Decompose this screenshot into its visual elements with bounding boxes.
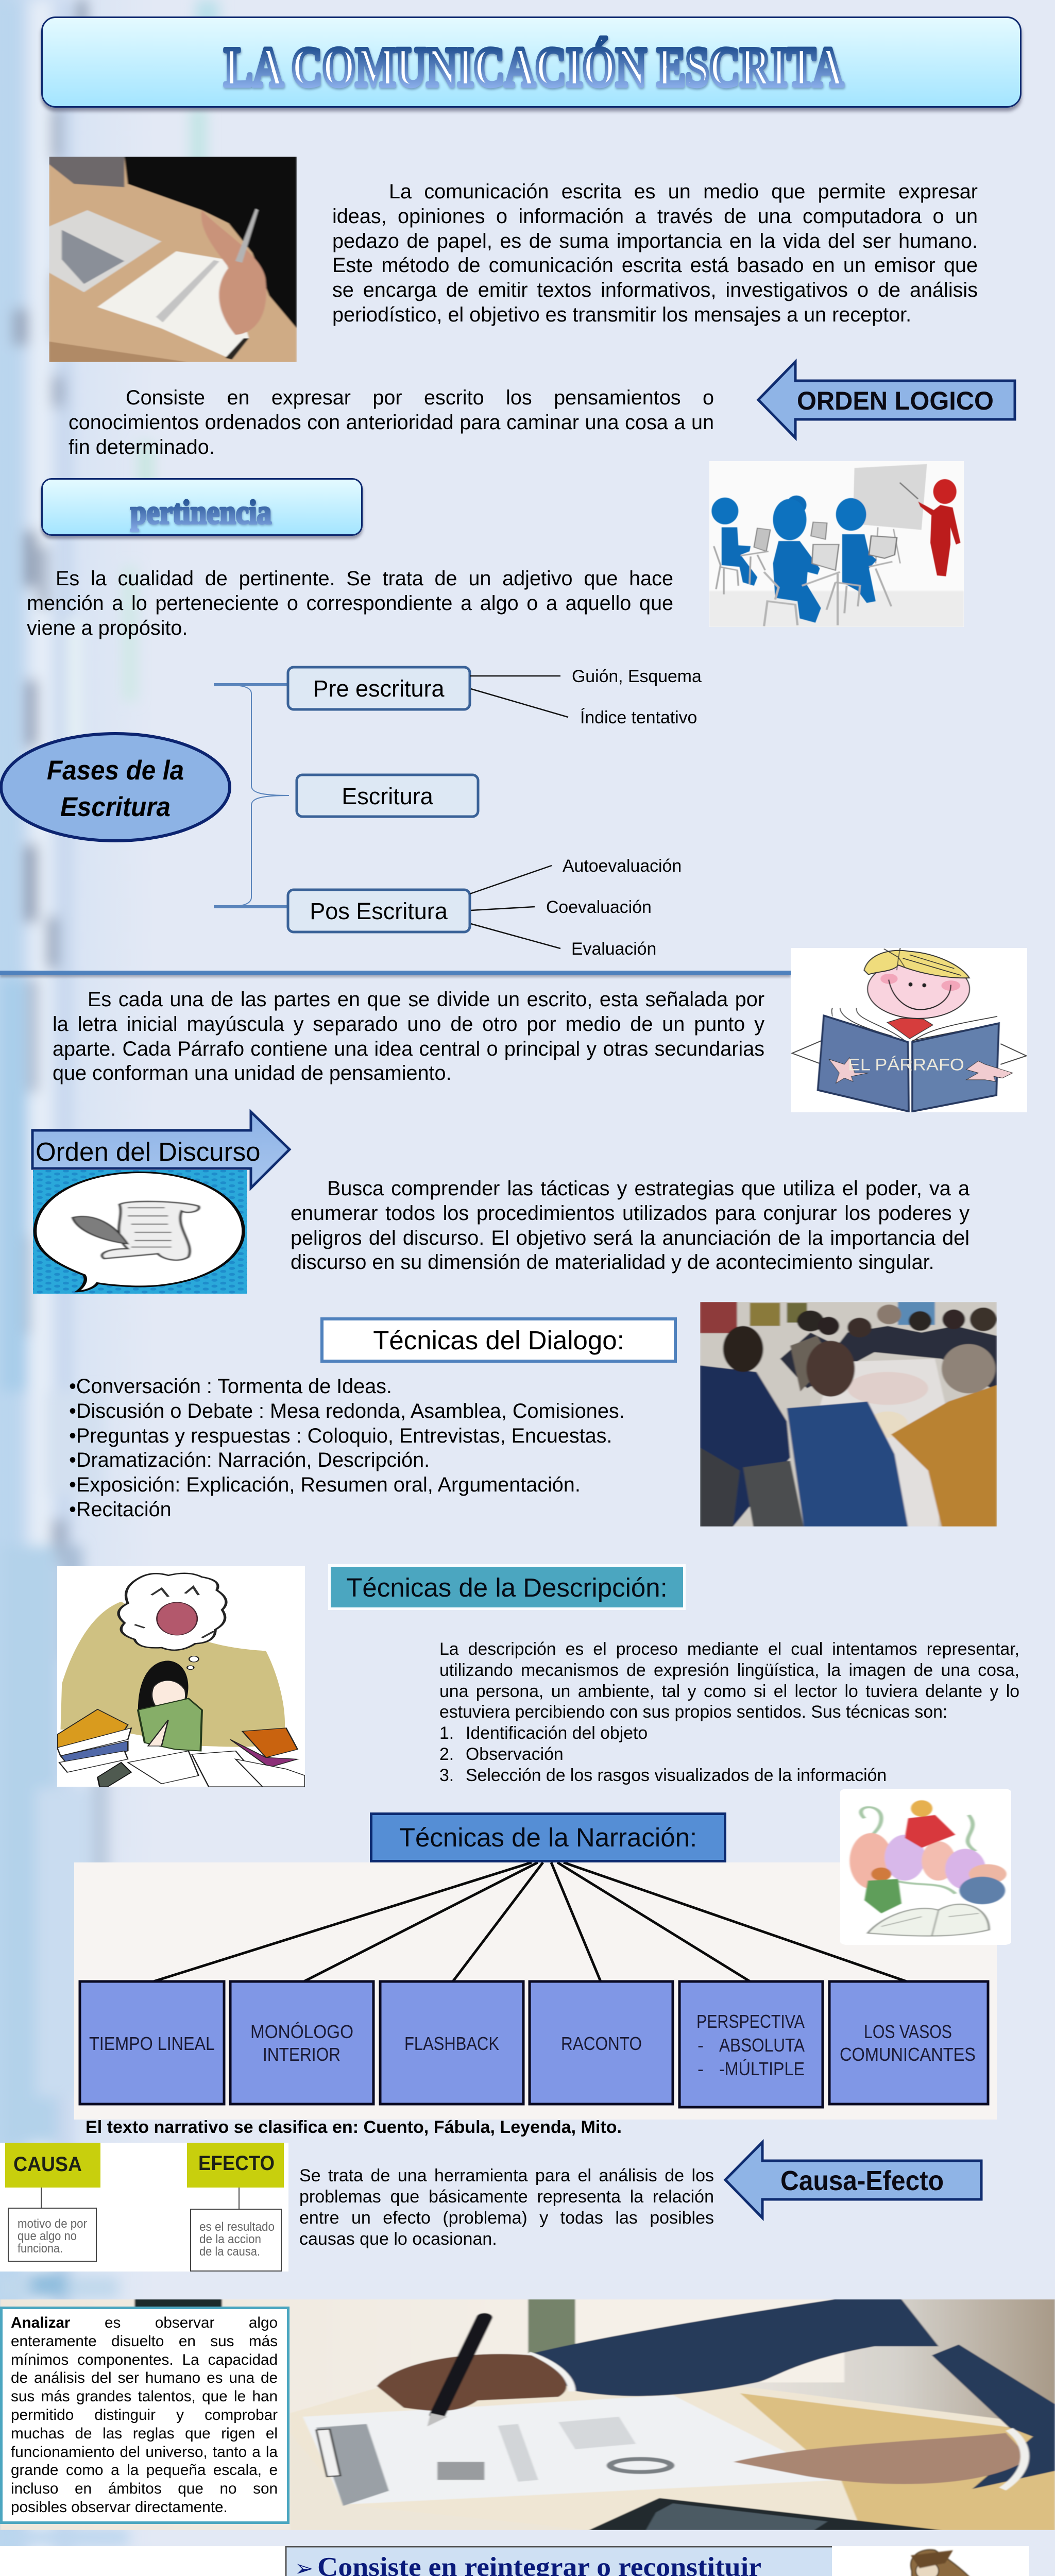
- branches and labels: pos escritura: Evaluación: [571, 939, 656, 959]
- box: efecto: de la accion: [199, 2232, 261, 2246]
- image: detective on stack of books: [847, 2550, 1025, 2576]
- text block: causa-efecto: causas que lo ocasionan.: [299, 2229, 497, 2249]
- note: clasificación del texto narrativo: El texto narrativo se clasifica en: Cuento, Fábula, Leyenda, Mito.: [86, 2117, 622, 2137]
- text block: pertinencia: viene a propósito.: [27, 617, 188, 639]
- box: escritura: [297, 775, 478, 817]
- box: raconto: [530, 1981, 673, 2104]
- box: causa: motivo de por: [18, 2217, 87, 2231]
- box: causa: [5, 2143, 100, 2261]
- box: los vasos comunicantes: [829, 1981, 988, 2104]
- text block: causa-efecto: problemas que básicamente representa la relación: [299, 2187, 714, 2207]
- image: el párrafo, child reading a book: [791, 948, 1027, 1112]
- text block: descripción: 2.: [439, 1744, 454, 1764]
- box: efecto: EFECTO: [198, 2152, 275, 2175]
- photo: businessman writing on documents: [0, 2299, 1055, 2530]
- photo: hand writing in notebook: [49, 157, 297, 362]
- heading: técnicas del diálogo: [320, 1317, 677, 1363]
- list: técnicas del diálogo: •Discusión o Debate : Mesa redonda, Asamblea, Comisiones.: [69, 1400, 625, 1422]
- heading: técnicas del diálogo: Técnicas del Dialogo:: [373, 1325, 624, 1355]
- text block: descripción: La descripción es el proceso mediante el cual intentamos representar,: [439, 1639, 1019, 1659]
- text: [11, 2314, 278, 2517]
- list: técnicas del diálogo: •Recitación: [69, 1498, 172, 1521]
- box: perspectiva: -: [697, 2035, 704, 2056]
- text block: causa-efecto: Se trata de una herramienta para el análisis de los: [299, 2166, 714, 2185]
- box: causa: CAUSA: [13, 2153, 82, 2176]
- box: monólogo interior: [230, 1981, 373, 2104]
- text block: orden del discurso: discurso en su dimensión de materialidad y de acontecimiento singular.: [291, 1251, 934, 1274]
- list: técnicas del diálogo: •Conversación : Tormenta de Ideas.: [69, 1375, 392, 1398]
- list: técnicas del diálogo: •Preguntas y respuestas : Coloquio, Entrevistas, Encuestas.: [69, 1425, 612, 1447]
- box: perspectiva: -MÚLTIPLE: [719, 2058, 805, 2079]
- list: técnicas del diálogo: •Dramatización: Narración, Descripción.: [69, 1449, 430, 1471]
- brace connector: [214, 685, 289, 907]
- box: flashback: FLASHBACK: [404, 2033, 499, 2054]
- text block: orden lógico: fin determinado.: [69, 436, 215, 459]
- heading: técnicas de la narración: [370, 1812, 726, 1862]
- text: Analizar es observar algo: [11, 2314, 278, 2331]
- arrow: causa-efecto: [721, 2138, 986, 2223]
- text block: descripción: 3.: [439, 1766, 454, 1785]
- arrow: orden logico: [756, 359, 1016, 441]
- text block: descripción: Observación: [466, 1744, 564, 1764]
- box: los vasos comunicantes: COMUNICANTES: [840, 2044, 976, 2065]
- text: incluso en ámbitos que no son: [11, 2480, 278, 2497]
- panel: técnicas de la narración chart: [74, 1862, 997, 2120]
- box: monólogo interior: INTERIOR: [263, 2044, 341, 2065]
- text: mínimos componentes. La capacidad: [11, 2351, 278, 2368]
- branches and labels: pre escritura: [470, 667, 702, 727]
- panel: síntesis: [0, 2546, 1029, 2576]
- arrow: causa-efecto: Causa-Efecto: [780, 2165, 944, 2196]
- text block: pertinencia: mención a lo perteneciente o correspondiente a algo o a aquello que: [27, 592, 673, 615]
- text block: el párrafo: la letra inicial mayúscula y separado uno de otro por medio de un punto y: [53, 1013, 764, 1036]
- heading panel: pertinencia: [41, 478, 363, 536]
- text block: el párrafo: aparte. Cada Párrafo contiene una idea central o principal y otras secundarias: [53, 1038, 764, 1060]
- text block: descripción: una persona, un ambiente, tal y como si el lector lo tuviera delante y lo: [439, 1682, 1019, 1701]
- box: efecto: [187, 2143, 284, 2271]
- text block: descripción: estuviera percibiendo con sus propios sentidos. Sus técnicas son:: [439, 1702, 947, 1722]
- image: girl studying with a thought cloud: [57, 1566, 305, 1787]
- text box: analizar: [0, 2307, 290, 2524]
- image: magic book with fairy tale characters: [840, 1789, 1011, 1945]
- text block: definición: periodístico, el objetivo es transmitir los mensajes a un receptor.: [332, 303, 911, 326]
- oval: fases de la escritura: [1, 734, 230, 841]
- text block: definición: Este método de comunicación escrita está basado en un emisor que: [332, 254, 978, 277]
- text block: descripción: [439, 1639, 1019, 1785]
- text: posibles observar directamente.: [11, 2499, 228, 2516]
- box: pos escritura: [288, 890, 470, 932]
- arrow: orden del discurso: [31, 1109, 292, 1191]
- photo: meeting around a table: [700, 1302, 997, 1527]
- text: permitido distinguir y comprobar: [11, 2406, 278, 2424]
- title: LA COMUNICACIÓN ESCRITA: [224, 37, 843, 98]
- box: causa: funciona.: [18, 2242, 63, 2256]
- branches and labels: pre escritura: Guión, Esquema: [572, 667, 702, 686]
- branches and labels: pos escritura: [470, 856, 682, 959]
- box: escritura: Escritura: [342, 783, 434, 809]
- oval: fases de la escritura: Fases de la: [47, 755, 184, 786]
- box: flashback: [380, 1981, 523, 2104]
- box: tiempo lineal: TIEMPO LINEAL: [89, 2033, 215, 2054]
- box: perspectiva: ABSOLUTA: [719, 2035, 805, 2056]
- box: pre escritura: Pre escritura: [313, 675, 445, 702]
- text block: pertinencia: Es la cualidad de pertinente. Se trata de un adjetivo que hace: [56, 567, 673, 590]
- text block: el párrafo: Es cada una de las partes en que se divide un escrito, esta señalada por: [88, 988, 764, 1011]
- box: los vasos comunicantes: LOS VASOS: [864, 2021, 952, 2042]
- title banner: [41, 16, 1022, 108]
- box: perspectiva: -: [697, 2058, 704, 2079]
- arrow: orden logico: ORDEN LOGICO: [797, 386, 994, 415]
- heading: técnicas de la narración: Técnicas de la Narración:: [399, 1823, 697, 1852]
- text block: definición: se encarga de emitir textos informativos, investigativos o de análisis: [332, 279, 978, 301]
- heading: técnicas de la descripción: [328, 1564, 686, 1610]
- text block: orden del discurso: peligros del discurso. El objetivo será la anunciación de la importancia del: [291, 1227, 969, 1249]
- text block: el párrafo: que conforman una unidad de pensamiento.: [53, 1062, 452, 1084]
- text: de análisis del ser humano es una de: [11, 2369, 278, 2386]
- text: muchas de las reglas que rigen el: [11, 2425, 278, 2442]
- box: efecto: de la causa.: [199, 2245, 260, 2259]
- box: perspectiva: PERSPECTIVA: [696, 2011, 805, 2032]
- connector lines: [154, 1862, 907, 1981]
- text block: descripción: utilizando mecanismos de expresión lingüística, la imagen de una cosa,: [439, 1660, 1019, 1680]
- branches and labels: pos escritura: Coevaluación: [546, 897, 652, 917]
- text: funcionamiento del universo, tanto a la: [11, 2444, 278, 2461]
- text block: definición: [332, 180, 978, 326]
- text block: descripción: 1.: [439, 1723, 454, 1743]
- arrow: orden del discurso: Orden del Discurso: [36, 1137, 261, 1166]
- text block: orden lógico: Consiste en expresar por escrito los pensamientos o: [126, 386, 714, 409]
- text block: causa-efecto: [299, 2166, 714, 2249]
- image: blue figures in a class with red teacher: [709, 461, 964, 627]
- box: efecto: es el resultado: [199, 2220, 275, 2234]
- text block: el párrafo: [53, 988, 764, 1084]
- text block: descripción: Selección de los rasgos visualizados de la información: [466, 1766, 887, 1785]
- image: speech bubble with scroll and quill: [33, 1170, 247, 1294]
- text block: definición: La comunicación escrita es un medio que permite expresar: [389, 180, 978, 203]
- text block: orden del discurso: enumerar todos los procedimientos utilizados para conjurar los poderes y: [291, 1202, 969, 1225]
- list: técnicas del diálogo: [69, 1375, 625, 1521]
- diagram: fases de la escritura: [0, 666, 702, 959]
- box: perspectiva: [679, 1981, 823, 2107]
- heading: pertinencia: [130, 494, 271, 531]
- text block: orden lógico: [69, 386, 714, 459]
- text: grande como a la pequeña escala, e: [11, 2462, 278, 2479]
- branches and labels: pre escritura: Índice tentativo: [580, 708, 697, 727]
- text block: pertinencia: [27, 567, 673, 639]
- diagram: causa y efecto: [0, 2143, 288, 2272]
- text block: definición: ideas, opiniones o información a través de una computadora o un: [332, 205, 978, 228]
- text block: descripción: Identificación del objeto: [466, 1723, 648, 1743]
- image: el párrafo, child reading a book: EL PÁRRAFO: [848, 1055, 964, 1074]
- box: pre escritura: [288, 667, 470, 709]
- box: tiempo lineal: [80, 1981, 224, 2104]
- text block: causa-efecto: entre un efecto (problema) y todas las posibles: [299, 2208, 714, 2228]
- text: enteramente disuelto en sus más: [11, 2333, 278, 2350]
- text block: definición: pedazo de papel, es de suma importancia en la vida del ser humano.: [332, 230, 978, 252]
- text block: orden del discurso: Busca comprender las tácticas y estrategias que utiliza el poder, va a: [327, 1177, 969, 1200]
- box: causa: que algo no: [18, 2229, 77, 2243]
- heading: técnicas de la descripción: Técnicas de la Descripción:: [346, 1572, 668, 1602]
- list: técnicas del diálogo: •Exposición: Explicación, Resumen oral, Argumentación.: [69, 1473, 581, 1496]
- box: pos escritura: Pos Escritura: [310, 898, 448, 924]
- box: monólogo interior: MONÓLOGO: [250, 2021, 353, 2042]
- branches and labels: pos escritura: Autoevaluación: [563, 856, 682, 876]
- text panel: síntesis: [286, 2547, 832, 2576]
- text block: orden del discurso: [291, 1177, 969, 1274]
- text: sus más grandes talentos, que le han: [11, 2388, 278, 2405]
- text block: orden lógico: conocimientos ordenados con anterioridad para caminar una cosa a un: [69, 411, 714, 434]
- divider bar: [0, 971, 791, 975]
- oval: fases de la escritura: Escritura: [60, 792, 171, 822]
- box: raconto: RACONTO: [561, 2033, 642, 2054]
